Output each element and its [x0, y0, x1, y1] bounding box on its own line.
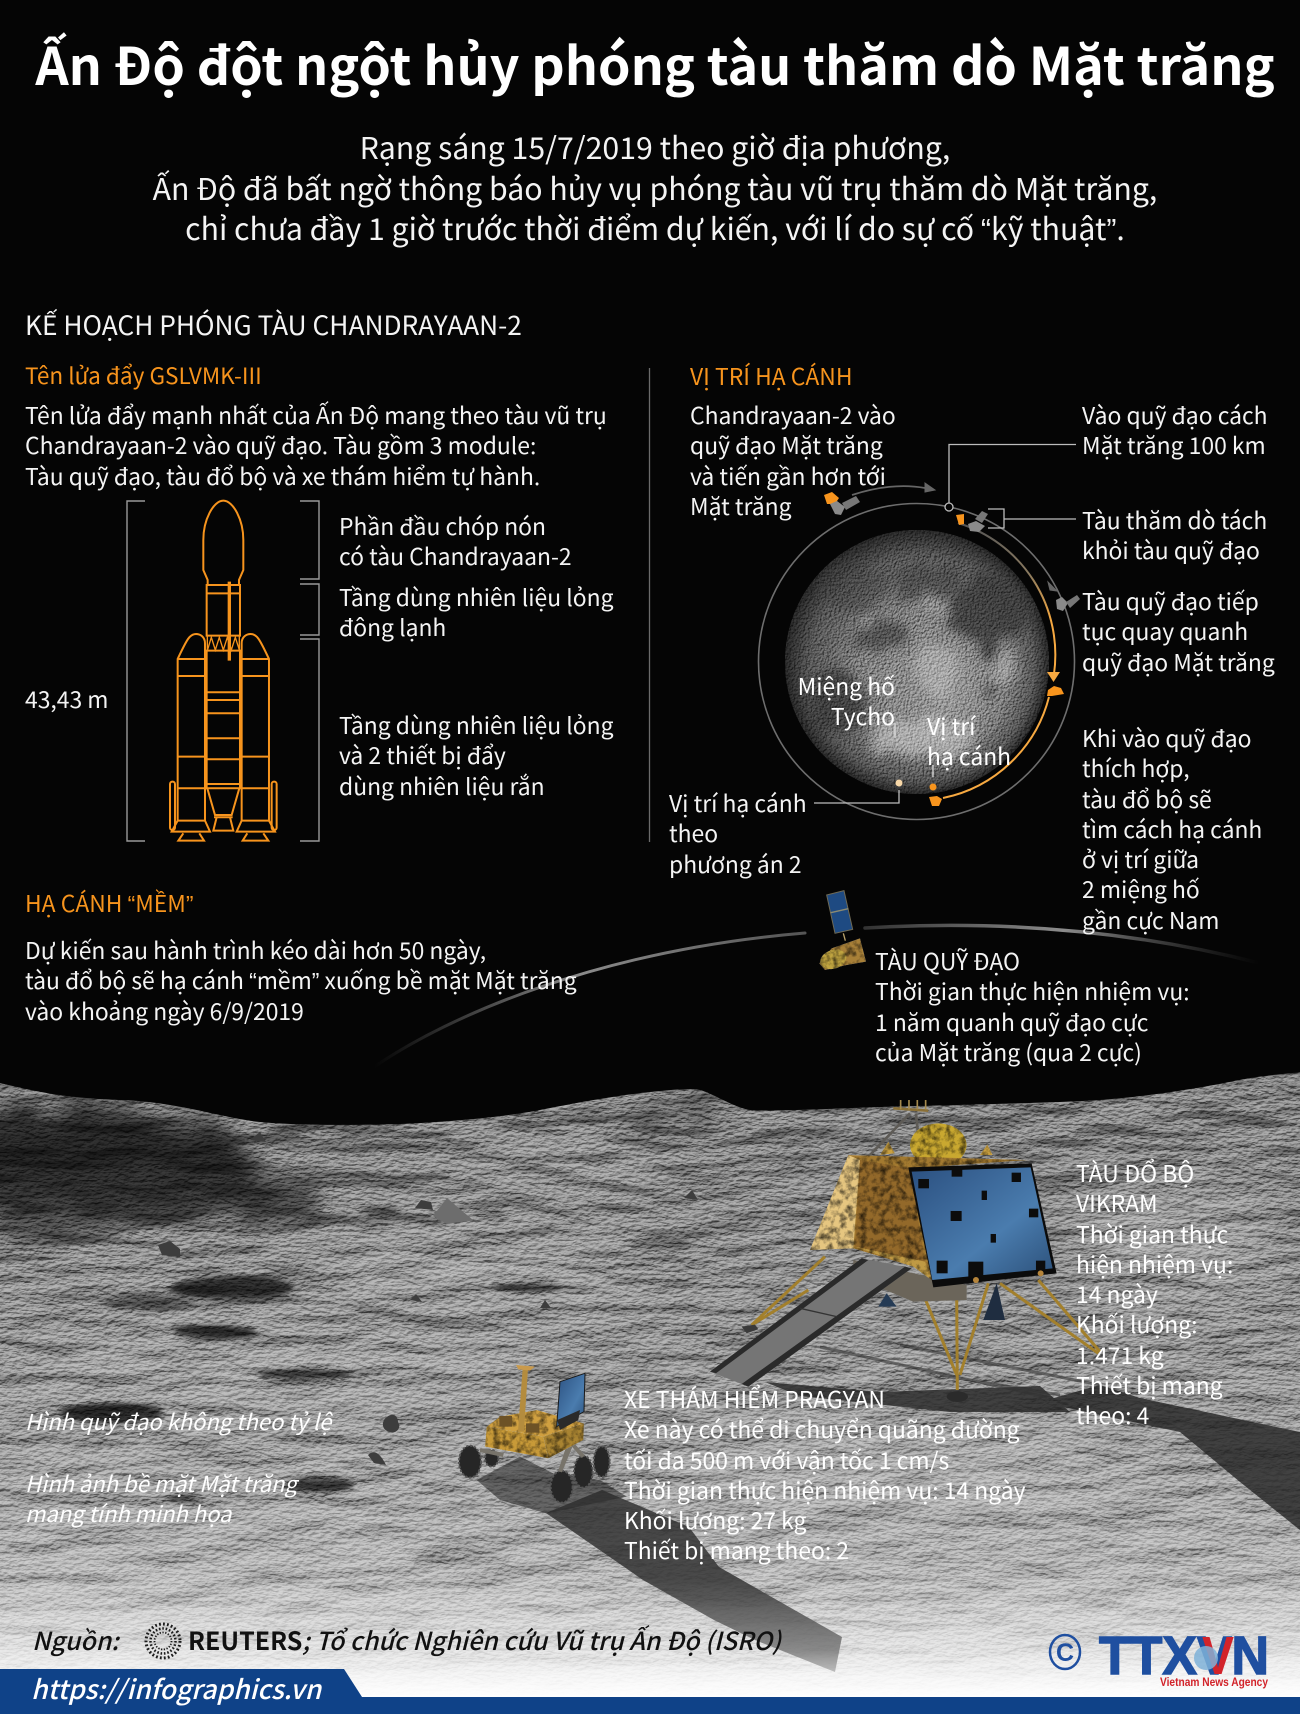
lander text: Khối lượng: [1076, 1306, 1197, 1340]
rover body [485, 1410, 584, 1458]
icon: orbiter satellite [818, 891, 866, 972]
orbit step 1: và tiến gần hơn tới [690, 458, 886, 492]
panel: lunar surface [0, 1060, 1300, 1714]
icon: Vikram lander [710, 1100, 1100, 1402]
rocket fairing [203, 501, 243, 585]
orbit step 4: Tàu quỹ đạo tiếp [1082, 583, 1259, 617]
soft landing text [25, 932, 577, 1027]
orbit step 5: gần cực Nam [1082, 902, 1219, 936]
logo: TTXVN: TTXVN [1099, 1626, 1269, 1686]
rocket label: liquid stage and boosters: và 2 thiết bị đẩy [339, 737, 506, 771]
copyright mark [1050, 1635, 1080, 1669]
rover text: Xe này có thể di chuyển quãng đường [624, 1411, 1020, 1445]
orbit step 2: Mặt trăng 100 km [1082, 427, 1266, 461]
rocket label: nose: Phần đầu chóp nón [339, 508, 546, 542]
rocket description: Tên lửa đẩy mạnh nhất của Ấn Độ mang theo tàu vũ trụ [25, 397, 607, 431]
orbiter text: Thời gian thực hiện nhiệm vụ: [875, 973, 1190, 1007]
deployment ramp [710, 1258, 912, 1387]
shaded hillside [0, 1108, 730, 1239]
rocket height: 43,43 m [25, 681, 109, 715]
label: landing site: Vị trí [927, 708, 975, 742]
rocket description [25, 397, 607, 492]
spacecraft markers [824, 492, 1080, 806]
soft landing text: Dự kiến sau hành trình kéo dài hơn 50 ngày, [25, 932, 486, 966]
orbit step 5: tàu đổ bộ sẽ [1082, 781, 1212, 815]
source text: REUTERS; Tổ chức Nghiên cứu Vũ trụ Ấn Độ (ISRO) [188, 1622, 781, 1658]
rover shadow [546, 1490, 842, 1672]
note: orbit scale: Hình quỹ đạo không theo tỷ lệ [25, 1405, 331, 1437]
orbit step 1: Mặt trăng [690, 488, 792, 522]
lander text: 14 ngày [1076, 1276, 1158, 1310]
orbit step 4: tục quay quanh [1082, 613, 1248, 647]
orbit step 5: tìm cách hạ cánh [1082, 811, 1262, 845]
orbit step 3 [1082, 502, 1267, 566]
orbiter text: TÀU QUỸ ĐẠO [875, 943, 1020, 977]
note: illustrative surface [25, 1467, 300, 1529]
orbit arrows [852, 483, 1060, 798]
divider [648, 368, 650, 842]
lander shadows [765, 1382, 1300, 1530]
orbit step 1 [690, 397, 896, 522]
soft landing text: tàu đổ bộ sẽ hạ cánh “mềm” xuống bề mặt Mặt trăng [25, 962, 577, 996]
label: Tycho crater: Miệng hố [798, 668, 895, 702]
intro paragraph: chỉ chưa đầy 1 giờ trước thời điểm dự kiến, với lí do sự cố “kỹ thuật”. [185, 205, 1125, 249]
source label: Nguồn: [32, 1622, 119, 1658]
rocket label: cryogenic stage [339, 579, 614, 643]
orbit step 5 [1082, 720, 1262, 936]
orbit step 3: khỏi tàu quỹ đạo [1082, 532, 1260, 566]
lander text: theo: 4 [1076, 1397, 1149, 1431]
soft landing text: vào khoảng ngày 6/9/2019 [25, 993, 304, 1027]
logo: TTXVN: V [1202, 1626, 1234, 1686]
right booster [237, 634, 277, 841]
rocket label: liquid stage and boosters: Tầng dùng nhiên liệu lỏng [339, 707, 614, 741]
lander legs [752, 1257, 1100, 1390]
gold dome [810, 1123, 1030, 1280]
lander text: VIKRAM [1076, 1185, 1158, 1219]
icon: Pragyan rover [459, 1365, 627, 1513]
logo: TTXVN: Vietnam News Agency [1160, 1675, 1268, 1689]
intro paragraph [152, 124, 1157, 249]
footer blue bar [0, 1669, 1300, 1714]
orbiter text: 1 năm quanh quỹ đạo cực [875, 1004, 1148, 1038]
orbiter text [875, 943, 1190, 1068]
website url: https://infographics.vn [31, 1668, 321, 1707]
heading: landing site: VỊ TRÍ HẠ CÁNH [690, 358, 853, 392]
heading: soft landing: HẠ CÁNH “MỀM” [25, 885, 194, 919]
solar panel [908, 1163, 1057, 1287]
orbit step 5: ở vị trí giữa [1082, 841, 1199, 875]
orbit step 2 [1082, 397, 1268, 461]
antenna mast [870, 1113, 921, 1160]
icon: Reuters dot ring [146, 1624, 180, 1658]
rover text: tối đa 500 m với vận tốc 1 cm/s [624, 1442, 949, 1476]
label: landing site: hạ cánh [927, 738, 1011, 772]
title: Ấn Độ đột ngột hủy phóng tàu thăm dò Mặt trăng [35, 24, 1275, 100]
grainy terrain relief [0, 1060, 1300, 1714]
orbit arc behind the orbiter [374, 925, 1259, 1067]
label: landing option 2 [669, 785, 807, 880]
orbit step 3: Tàu thăm dò tách [1082, 502, 1267, 536]
rover mast [518, 1368, 528, 1432]
rocket description: Chandrayaan-2 vào quỹ đạo. Tàu gồm 3 module: [25, 427, 536, 461]
brackets around rocket [127, 501, 319, 841]
rover wheels [459, 1446, 610, 1503]
logo: TTXVN: C [1056, 1639, 1074, 1667]
soft ground highlights [40, 1151, 1280, 1510]
section heading: KẾ HOẠCH PHÓNG TÀU CHANDRAYAAN-2 [25, 304, 522, 343]
orbit step 1: Chandrayaan-2 vào [690, 397, 896, 431]
rover text [624, 1381, 1026, 1566]
rocket core [207, 585, 240, 636]
icon: rocket GSLV outline [170, 501, 277, 841]
lander text: hiện nhiệm vụ: [1076, 1246, 1233, 1280]
orbiter text: của Mặt trăng (qua 2 cực) [875, 1034, 1142, 1068]
panel: moon landing diagram [758, 444, 1080, 820]
orbit step 4 [1082, 583, 1275, 678]
orbit step 5: 2 miệng hố [1082, 871, 1200, 905]
lander text: TÀU ĐỔ BỘ [1076, 1155, 1194, 1189]
intro paragraph: Rạng sáng 15/7/2019 theo giờ địa phương, [360, 124, 950, 168]
undulating mounds [0, 1060, 1300, 1714]
intro paragraph: Ấn Độ đã bất ngờ thông báo hủy vụ phóng tàu vũ trụ thăm dò Mặt trăng, [153, 164, 1157, 208]
bottom fade [0, 1589, 1300, 1697]
rover text: Thời gian thực hiện nhiệm vụ: 14 ngày [624, 1472, 1026, 1506]
lander text: 1.471 kg [1076, 1337, 1164, 1371]
heading: rocket name: Tên lửa đẩy GSLVMK-III [25, 358, 262, 391]
label: landing option 2: Vị trí hạ cánh [669, 785, 807, 819]
left booster [170, 634, 210, 841]
note: illustrative surface: Hình ảnh bề mặt Mặt trăng [25, 1467, 297, 1499]
moon orbit ring [758, 504, 1074, 820]
rocket label: liquid stage and boosters: dùng nhiên liệu rắn [339, 768, 545, 802]
label: Tycho crater [798, 668, 895, 732]
rocket label: cryogenic stage: đông lạnh [339, 609, 446, 643]
illustration layer: moon surface, moon diagram, rocket [0, 368, 1300, 1714]
rocket label: nose: có tàu Chandrayaan-2 [339, 538, 572, 572]
rocket label: nose [339, 508, 572, 572]
rover ground shadow [477, 1457, 627, 1513]
orbit step 2: Vào quỹ đạo cách [1082, 397, 1268, 431]
lander text [1076, 1155, 1233, 1431]
rover text: XE THÁM HIỂM PRAGYAN [624, 1381, 885, 1415]
moon globe [785, 530, 1049, 794]
rear shadowed underside [853, 1260, 967, 1302]
rocket description: Tàu quỹ đạo, tàu đổ bộ và xe thám hiểm tự hành. [25, 458, 540, 492]
orbit step 4: quỹ đạo Mặt trăng [1082, 644, 1275, 678]
orbit step 5: Khi vào quỹ đạo [1082, 720, 1252, 754]
rover text: Khối lượng: 27 kg [624, 1502, 806, 1536]
orbit step 5: thích hợp, [1082, 750, 1190, 784]
rover solar panel [557, 1373, 585, 1427]
lander text: Thời gian thực [1076, 1216, 1228, 1250]
rover text: Thiết bị mang theo: 2 [624, 1532, 849, 1566]
gold body [810, 1155, 1030, 1280]
label: Tycho crater: Tycho [831, 698, 895, 732]
note: illustrative surface: mang tính minh họa [25, 1497, 231, 1529]
rocket label: cryogenic stage: Tầng dùng nhiên liệu lỏng [339, 579, 614, 613]
label: landing option 2: phương án 2 [669, 846, 802, 880]
lander text: Thiết bị mang [1076, 1367, 1223, 1401]
orbit step 1: quỹ đạo Mặt trăng [690, 427, 883, 461]
label: landing site [927, 708, 1011, 772]
leader lines [814, 444, 1076, 803]
craters and rocks [60, 1207, 690, 1566]
label: landing option 2: theo [669, 815, 718, 849]
rocket label: liquid stage and boosters [339, 707, 614, 802]
